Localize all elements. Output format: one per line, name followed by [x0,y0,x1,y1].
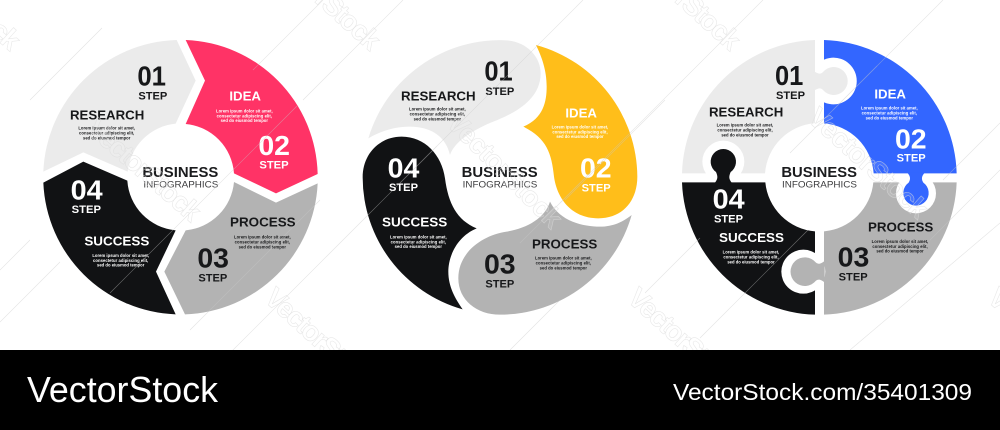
puzzle segment 01 research: consectetur adipiscing elit, [717,127,773,132]
centre title: BUSINESS [781,165,857,181]
segment 01 research: RESEARCH [401,90,476,104]
segment 02 idea: Lorem ipsum dolor sit amet, [552,124,608,129]
puzzle segment 04 success: sed do eiusmod tempor [727,260,775,265]
puzzle segment 04 success: consectetur adipiscing elit, [723,255,779,260]
segment 03 process: 03 [484,248,516,279]
centre title: INFOGRAPHICS [463,179,537,189]
segment 01 research [368,40,541,155]
puzzle segment 04 success: SUCCESS [719,231,784,245]
segment 03 process: STEP [198,273,227,285]
segment 04 success: STEP [72,204,101,216]
segment 03 process: STEP [485,278,514,290]
footer banner [0,350,1000,430]
segment 02 idea: IDEA [229,90,261,104]
segment 01 research: sed do eiusmod tempor [83,135,131,140]
segment 03 process: Lorem ipsum dolor sit amet, [535,256,592,261]
puzzle segment 03 process: sed do eiusmod tempor [876,249,924,254]
segment 02 idea: 02 [258,130,290,161]
puzzle segment 03 process: Lorem ipsum dolor sit amet, [872,239,928,244]
segment 03 process: PROCESS [230,216,296,230]
segment 02 idea: IDEA [565,106,597,120]
puzzle segment 01 research: RESEARCH [709,106,783,120]
watermarks: VectorStock [441,106,569,235]
segment 03 process: sed do eiusmod tempor [239,244,286,249]
panel: arrow cycle chart [43,40,318,314]
segment 02 idea: consectetur adipiscing elit, [552,129,608,134]
puzzle segment 03 process: consectetur adipiscing elit, [872,244,928,249]
puzzle segment 02 idea: 02 [895,123,927,154]
centre title: INFOGRAPHICS [143,179,218,189]
segment 04 success: consectetur adipiscing elit, [93,258,148,263]
segment 04 success: 04 [388,152,420,183]
segment 02 idea [523,45,637,218]
segment 01 research: STEP [138,90,167,102]
segment 03 process: consectetur adipiscing elit, [536,261,591,266]
puzzle segment 04 success: STEP [714,213,743,225]
segment 04 success: Lorem ipsum dolor sit amet, [390,234,447,239]
segment 01 research: Lorem ipsum dolor sit amet, [409,106,466,111]
segment 01 research [43,40,196,172]
segment 02 idea: consectetur adipiscing elit, [217,113,272,118]
puzzle segment 02 idea: IDEA [874,87,906,101]
puzzle segment 03 process [824,173,957,315]
puzzle segment 04 success: 04 [713,183,745,214]
puzzle segment 04 success: Lorem ipsum dolor sit amet, [723,250,779,255]
segment 03 process: 03 [197,243,229,274]
segment 03 process: PROCESS [532,237,597,251]
segment 04 success: sed do eiusmod tempor [395,244,442,249]
puzzle segment 03 process: PROCESS [868,220,933,234]
segment 01 research: 01 [137,60,166,91]
puzzle segment 04 success [682,149,825,315]
watermarks: VectorStock [259,282,384,399]
segment 04 success [363,137,477,309]
segment 03 process: consectetur adipiscing elit, [235,240,290,245]
puzzle segment 01 research: sed do eiusmod tempor [721,132,769,137]
segment 04 success: SUCCESS [382,216,447,230]
panel: puzzle cycle chart [682,40,957,315]
centre title: INFOGRAPHICS [782,179,857,189]
segment 04 success [43,162,176,314]
puzzle segment 01 research: Lorem ipsum dolor sit amet, [717,122,773,127]
puzzle segment 01 research: 01 [775,60,803,91]
segment 04 success: consectetur adipiscing elit, [391,239,446,244]
panel: swirl cycle chart [363,40,637,315]
watermarks: VectorStock [802,101,935,225]
image id url: VectorStock.com/35401309 [673,379,972,405]
centre title: BUSINESS [462,165,538,181]
puzzle segment 03 process: 03 [838,242,869,273]
centre title [781,165,857,189]
segment 03 process [164,182,318,314]
segment 04 success: Lorem ipsum dolor sit amet, [92,253,149,258]
puzzle segment 03 process: STEP [839,272,868,284]
puzzle segment 01 research [682,40,815,183]
watermarks: VectorStock [81,112,208,228]
segment 01 research: RESEARCH [70,108,144,122]
segment 02 idea: Lorem ipsum dolor sit amet, [216,108,273,113]
segment 04 success: sed do eiusmod tempor [97,263,145,268]
segment 02 idea: STEP [259,159,289,171]
segment 01 research: consectetur adipiscing elit, [79,131,134,136]
segment 01 research: Lorem ipsum dolor sit amet, [78,125,135,130]
segment 02 idea [186,40,318,193]
centre title: BUSINESS [142,165,219,181]
puzzle segment 02 idea: consectetur adipiscing elit, [862,111,917,116]
segment 01 research: sed do eiusmod tempor [414,116,461,121]
centre title [462,165,538,189]
puzzle segment 02 idea: STEP [897,153,926,165]
puzzle segment 02 idea: sed do eiusmod tempor [866,116,913,121]
centre title [142,165,219,189]
segment 01 research: consectetur adipiscing elit, [410,111,465,116]
segment 01 research: STEP [485,86,514,98]
segment 02 idea: sed do eiusmod tempor [221,118,268,123]
brand logo text: VectorStock [27,369,219,410]
segment 02 idea: 02 [580,152,612,183]
segment 02 idea: STEP [582,182,611,194]
watermarks: VectorStock [622,282,747,399]
segment 02 idea: sed do eiusmod tempor [556,134,604,139]
segment 03 process: Lorem ipsum dolor sit amet, [234,235,291,240]
segment 03 process: sed do eiusmod tempor [540,266,587,271]
segment 04 success: STEP [389,182,418,194]
puzzle segment 01 research: STEP [776,90,805,102]
segment 03 process [458,202,632,315]
segment 01 research: 01 [484,56,513,87]
segment 04 success: SUCCESS [84,234,149,248]
segment 04 success: 04 [71,174,103,205]
puzzle segment 02 idea [813,40,957,173]
puzzle segment 02 idea: Lorem ipsum dolor sit amet, [861,106,918,111]
